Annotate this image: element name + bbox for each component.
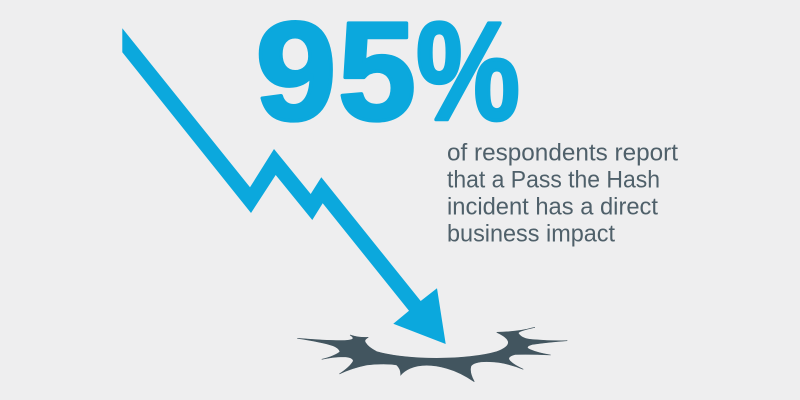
big statistic: 95%	[256, 0, 520, 150]
icon: impact crater	[297, 327, 567, 382]
description text: business impact	[447, 220, 615, 248]
description text: that a Pass the Hash	[447, 166, 660, 194]
description text: incident has a direct	[447, 194, 658, 220]
description text: of respondents report	[447, 140, 678, 166]
description text	[447, 140, 678, 248]
icon: falling zigzag arrow	[122, 28, 446, 344]
